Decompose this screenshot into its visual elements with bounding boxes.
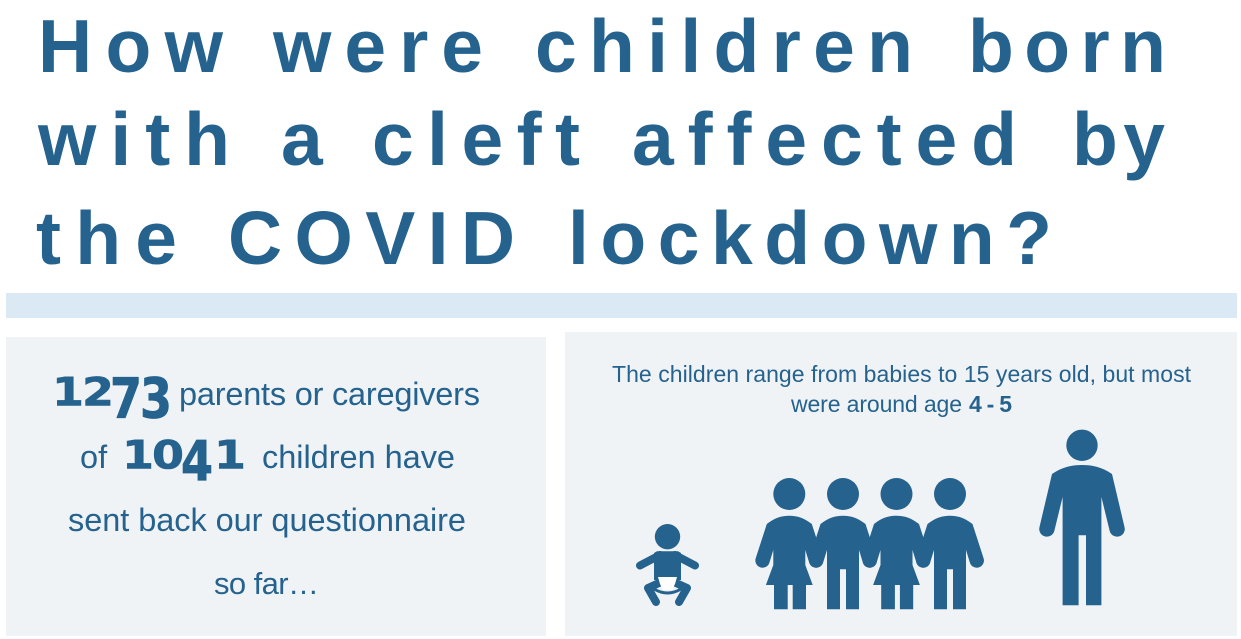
title: were	[272, 4, 483, 88]
title: affected	[632, 97, 1017, 181]
panel: ages	[565, 332, 1237, 636]
stat: 1273 parents: 1	[52, 370, 84, 416]
title: born	[968, 4, 1166, 88]
stat: 1041 children: 4	[181, 430, 213, 495]
title: the	[36, 196, 177, 280]
panel: respondents	[6, 337, 546, 636]
stat: 1041 children: children have	[262, 439, 455, 475]
stat: 1041 children: 1	[214, 433, 246, 479]
text: age range: were around age	[790, 391, 962, 417]
icon: baby	[640, 524, 695, 602]
stat: 1041 children: of	[80, 439, 108, 475]
title: with	[37, 97, 230, 181]
title: a	[281, 97, 324, 181]
icon: boy 2	[916, 478, 984, 609]
title: lockdown?	[568, 196, 1052, 280]
stat: 1273 parents: 7	[110, 367, 142, 432]
icon: girl 2	[863, 478, 930, 609]
title: How	[38, 4, 224, 88]
stat: 1273 parents: 3	[140, 367, 172, 432]
stat: 1041 children: 1	[122, 433, 154, 479]
stat: 1041 children: 0	[152, 433, 184, 479]
text: age range: The children range from babies to 15 years old, but most	[612, 361, 1192, 387]
icon: boy 1	[809, 478, 877, 609]
text: sent back: sent back our questionnaire	[68, 502, 466, 538]
icon: adult	[1039, 430, 1125, 605]
stat: 1273 parents: parents or caregivers	[179, 376, 480, 412]
stat: 1273 parents: 2	[82, 370, 114, 416]
text: age range	[612, 361, 1192, 417]
title: cleft	[372, 97, 580, 181]
stat: 1273 parents	[52, 367, 480, 432]
divider band	[6, 293, 1237, 318]
stat: 1041 children	[80, 430, 455, 495]
title: COVID	[228, 196, 515, 280]
text: so far: so far…	[214, 566, 319, 601]
title: children	[535, 4, 913, 88]
title	[36, 4, 1166, 280]
text: age range: 4 - 5	[969, 391, 1012, 417]
icon: girl 1	[755, 478, 823, 609]
title: by	[1072, 97, 1165, 181]
